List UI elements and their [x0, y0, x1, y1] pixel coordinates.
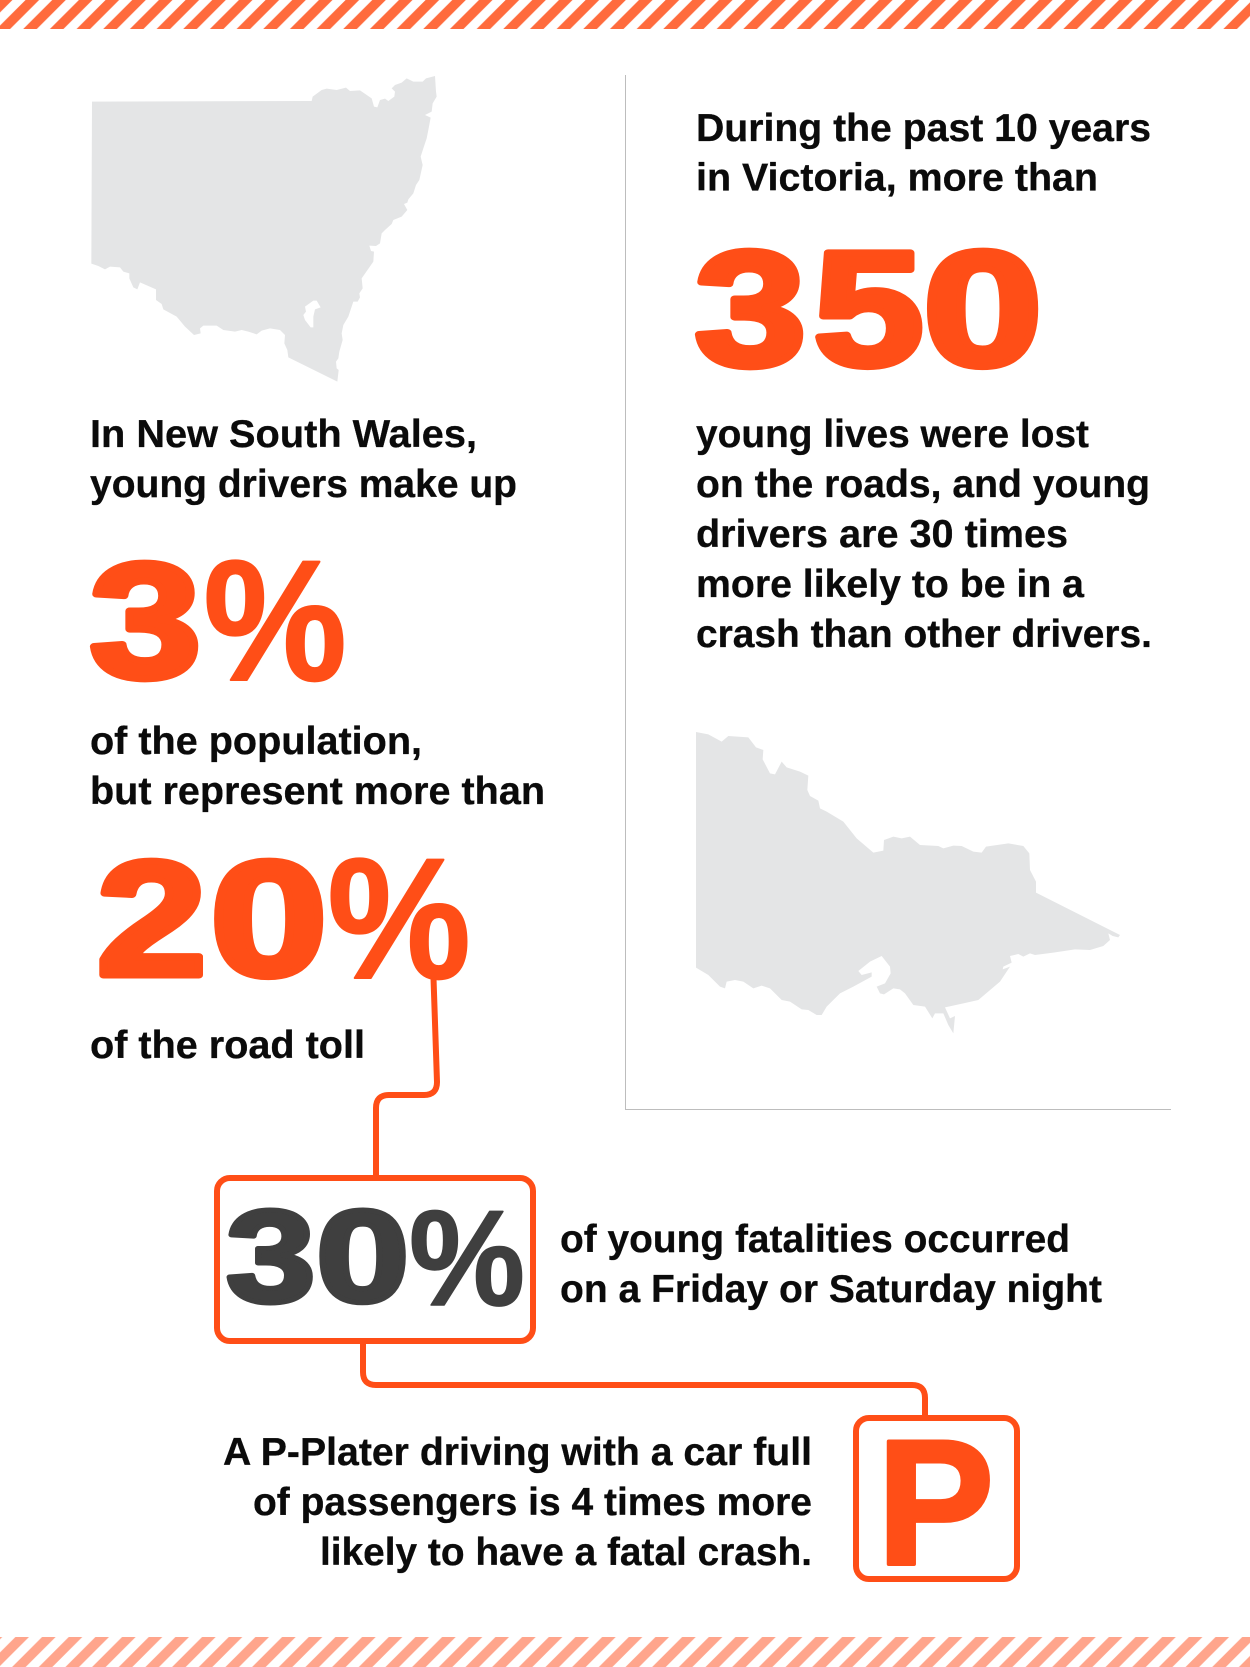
connector: 30% box to P plate — [363, 1341, 925, 1418]
big number: 20%: 2 — [97, 827, 207, 1010]
text: young lives lost: on the roads, and young — [696, 463, 1150, 506]
text: NSW intro — [90, 413, 517, 506]
text: P-Plater: likely to have a fatal crash. — [320, 1531, 812, 1574]
text: of the population — [90, 720, 545, 813]
text: P-Plater: of passengers is 4 times more — [253, 1481, 812, 1524]
box around 30% — [217, 1178, 533, 1341]
text: fatalities: of young fatalities occurred — [560, 1218, 1070, 1261]
map: Victoria — [696, 732, 1120, 1033]
text: Victoria intro: in Victoria, more than — [696, 156, 1098, 200]
big number: 3%: % — [203, 525, 347, 717]
text: of the population: of the population, — [90, 720, 422, 763]
big number: 30% — [226, 1182, 525, 1334]
big number: 350: 0 — [923, 217, 1042, 400]
panel: New South Wales — [90, 76, 545, 1067]
text: young lives lost: crash than other drivers. — [696, 613, 1152, 656]
text: young lives lost: young lives were lost — [696, 413, 1089, 456]
big number: 20%: 0 — [210, 827, 327, 1010]
text: fatalities — [560, 1218, 1102, 1311]
big number: 350 — [695, 217, 1042, 400]
text: young lives lost — [696, 413, 1152, 656]
big number: 350: 5 — [813, 217, 924, 400]
big number: 3% — [90, 525, 347, 717]
text: NSW intro: In New South Wales, — [90, 413, 477, 456]
big number: 20% — [97, 823, 471, 1015]
big number: 30%: % — [409, 1182, 525, 1334]
text: NSW intro: young drivers make up — [90, 463, 517, 506]
big number: 30%: 0 — [316, 1182, 410, 1330]
callout: P-plate — [223, 1403, 1017, 1602]
panel: Victoria — [695, 107, 1152, 1033]
icon: P plate box — [856, 1418, 1017, 1579]
text: Victoria intro: During the past 10 years — [696, 107, 1151, 150]
big number: 350: 3 — [695, 217, 806, 400]
text: of the road toll: of the road toll — [90, 1024, 365, 1067]
big number: 20%: % — [327, 823, 471, 1015]
big number: 3%: 3 — [90, 529, 201, 712]
text: Victoria intro — [696, 107, 1151, 200]
text: young lives lost: more likely to be in a — [696, 563, 1084, 606]
text: fatalities: on a Friday or Saturday night — [560, 1268, 1102, 1311]
text: young lives lost: drivers are 30 times — [696, 513, 1068, 556]
top hazard stripe band — [0, 0, 1250, 29]
text: P-Plater — [223, 1431, 812, 1574]
bottom hazard stripe band — [0, 1637, 1250, 1667]
callout: 30% — [217, 1178, 1102, 1341]
icon: P letter: P — [877, 1403, 994, 1602]
connector: 20% to 30% box — [376, 978, 437, 1178]
big number: 30%: 3 — [226, 1182, 316, 1330]
text: P-Plater: A P-Plater driving with a car full — [223, 1431, 812, 1474]
text: of the population: but represent more than — [90, 770, 545, 813]
map: New South Wales — [91, 76, 437, 382]
panel divider: vertical and bottom rule — [626, 75, 1171, 1110]
